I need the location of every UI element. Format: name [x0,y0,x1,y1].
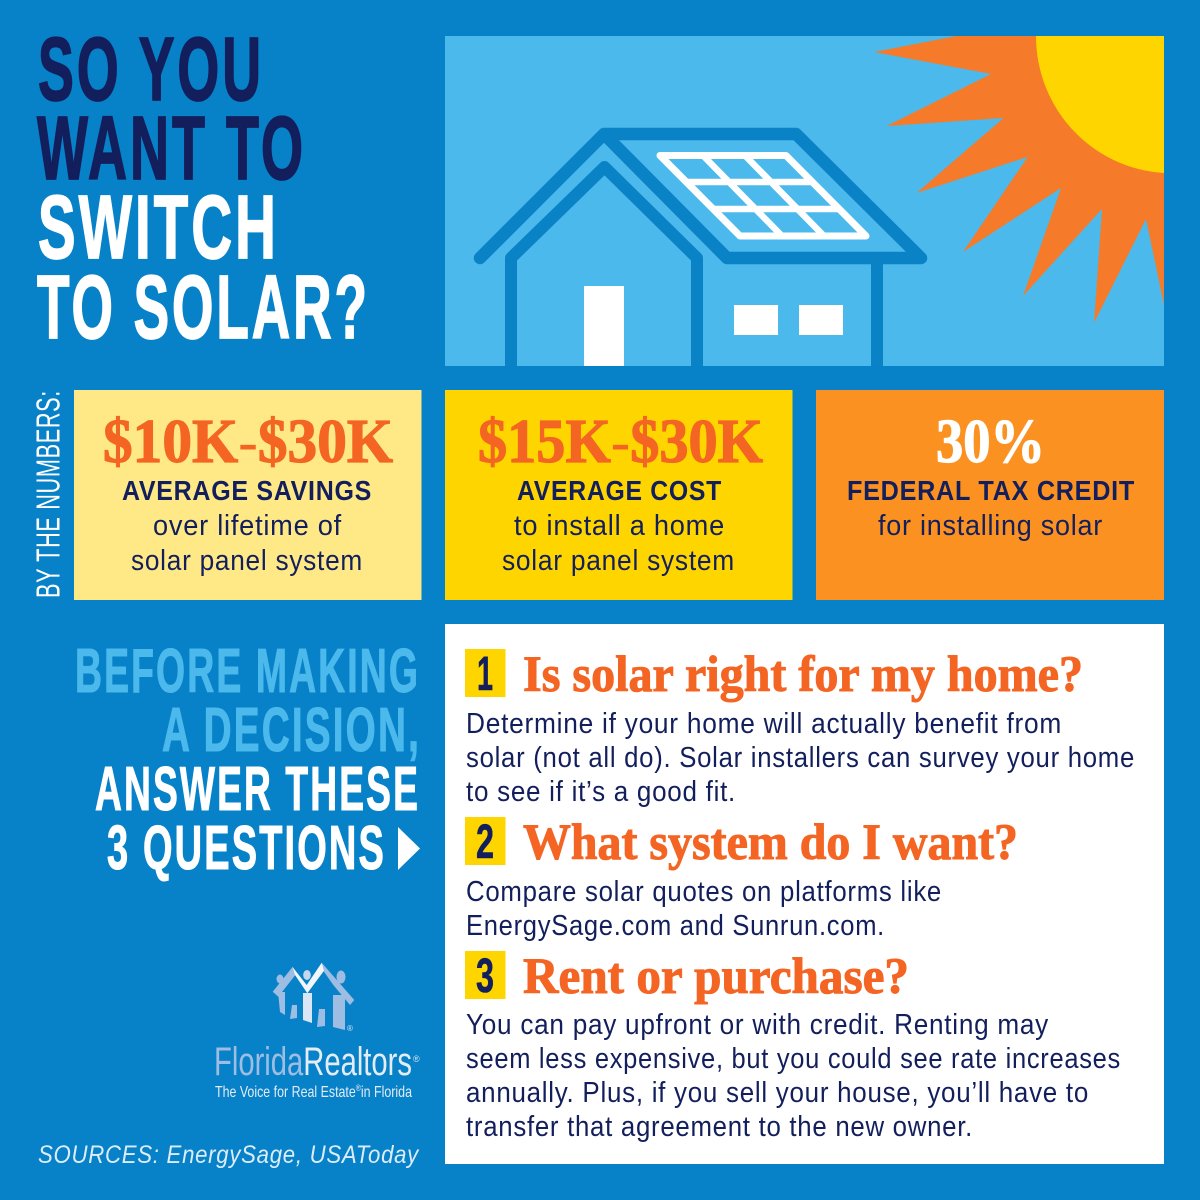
icon: houses and people: ® [347,1024,353,1033]
panel: average savings: over lifetime of [153,510,342,542]
question 2: EnergySage.com and Sunrun.com. [466,910,885,942]
panel: federal tax credit: 30% [936,408,1045,476]
title: SWITCH [38,178,279,278]
logo tagline: The Voice for Real Estate [215,1084,396,1101]
question 2: 2 [476,816,494,869]
title: WANT TO [37,99,306,199]
panel: average savings: AVERAGE SAVINGS [122,475,372,506]
panel: federal tax credit [816,390,1164,600]
icon: windows [734,305,843,335]
icon: house outline [480,134,921,366]
question 1: solar (not all do). Solar installers can survey your home [466,742,1135,774]
question 1: 1 [477,648,493,701]
question 3: seem less expensive, but you could see rate increases [466,1043,1121,1075]
question 2: Compare solar quotes on platforms like [466,876,942,908]
question 1 [465,647,1135,808]
side label: by the numbers: BY THE NUMBERS: [30,390,66,598]
question 1: to see if it’s a good fit. [466,776,736,808]
question 3: transfer that agreement to the new owner. [466,1111,973,1143]
panel: average savings: $10K-$30K [103,408,393,476]
logo: Florida Realtors: ® [413,1054,420,1064]
panel: average cost: solar panel system [502,545,735,577]
icon: houses and people [273,963,354,1033]
question 3: annually. Plus, if you sell your house, you’ll have to [466,1077,1089,1109]
title: TO SOLAR? [37,258,370,358]
question 3: Rent or purchase? [523,949,909,1005]
illustration: house with solar panels and sun [445,36,1164,366]
logo tagline: in Florida [361,1084,412,1101]
icon: sun rays [874,36,1164,323]
question 2: What system do I want? [523,815,1018,871]
icon: door [584,286,624,366]
logo: Florida Realtors [214,963,420,1101]
title [37,20,370,358]
panel: average cost: $15K-$30K [478,408,763,476]
question 1: Is solar right for my home? [523,647,1083,703]
panel: average savings: solar panel system [131,545,363,577]
question 3: You can pay upfront or with credit. Renting may [466,1009,1049,1041]
arrow [398,827,420,870]
callout: before making a decision [75,637,421,883]
panel: average cost: AVERAGE COST [517,475,722,506]
title: SO YOU [38,20,264,120]
callout: before making a decision: A DECISION, [162,696,421,765]
icon: sun disc [1036,36,1164,173]
callout: before making a decision: BEFORE MAKING [75,637,420,706]
panel: three questions [445,624,1164,1164]
panel: average savings [74,390,422,600]
icon: solar panel [660,156,866,236]
panel: federal tax credit: for installing solar [878,510,1103,542]
callout: before making a decision: ANSWER THESE [95,755,420,824]
panel: average cost [445,390,792,600]
question 1: Determine if your home will actually benefit from [466,708,1062,740]
sources: SOURCES: EnergySage, USAToday [38,1141,420,1169]
logo tagline: ® [356,1083,361,1093]
question 3: 3 [476,950,494,1003]
question 2 [465,815,1018,942]
panel: federal tax credit: FEDERAL TAX CREDIT [847,475,1135,506]
logo wordmark: FloridaRealtors [214,1040,412,1084]
callout: before making a decision: 3 QUESTIONS [107,814,386,883]
panel: average cost: to install a home [514,510,725,542]
question 3 [465,949,1121,1143]
